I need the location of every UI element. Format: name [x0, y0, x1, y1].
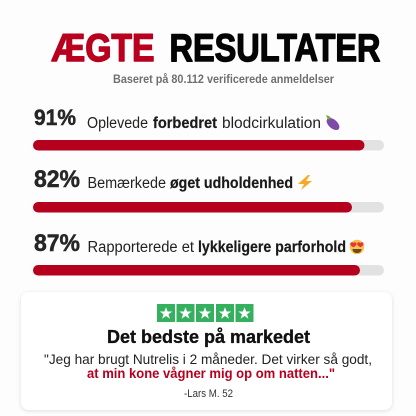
title: RESULTATER [170, 27, 380, 70]
label: Bemærkede [88, 175, 166, 192]
icon: lightning bolt [298, 175, 312, 190]
label: forbedret [153, 115, 217, 132]
label: Oplevede [87, 115, 148, 132]
label [88, 175, 293, 192]
quote highlight: at min kone vågner mig op om natten..." [87, 365, 335, 381]
progress bar [33, 140, 384, 150]
percentage: 82% [34, 166, 80, 193]
stat row: 91% [33, 105, 384, 150]
label: øget udholdenhed [170, 175, 293, 192]
subtitle: Baseret på 80.112 verificerede anmeldelser [113, 74, 334, 86]
stat row: 87% [33, 230, 384, 276]
label: Rapporterede et [88, 239, 195, 256]
label [88, 239, 346, 256]
heading: Det bedste på markedet [107, 326, 310, 347]
attribution: -Lars M. 52 [184, 388, 233, 400]
label: lykkeligere parforhold [198, 239, 346, 256]
progress bar [33, 265, 384, 276]
stat row: 82% [33, 166, 384, 212]
quote: "Jeg har brugt Nutrelis i 2 måneder. Det virker så godt, [44, 351, 372, 367]
icon: five star rating [157, 304, 254, 322]
icon: eggplant [324, 115, 342, 132]
panel: testimonial card [21, 292, 392, 410]
label [87, 115, 321, 132]
title: ÆGTE [52, 27, 154, 70]
progress bar [33, 202, 384, 212]
label: blodcirkulation [222, 115, 321, 132]
title [52, 27, 380, 70]
percentage: 87% [34, 230, 80, 257]
percentage: 91% [34, 105, 76, 130]
icon: heart eyes emoji [350, 240, 364, 254]
